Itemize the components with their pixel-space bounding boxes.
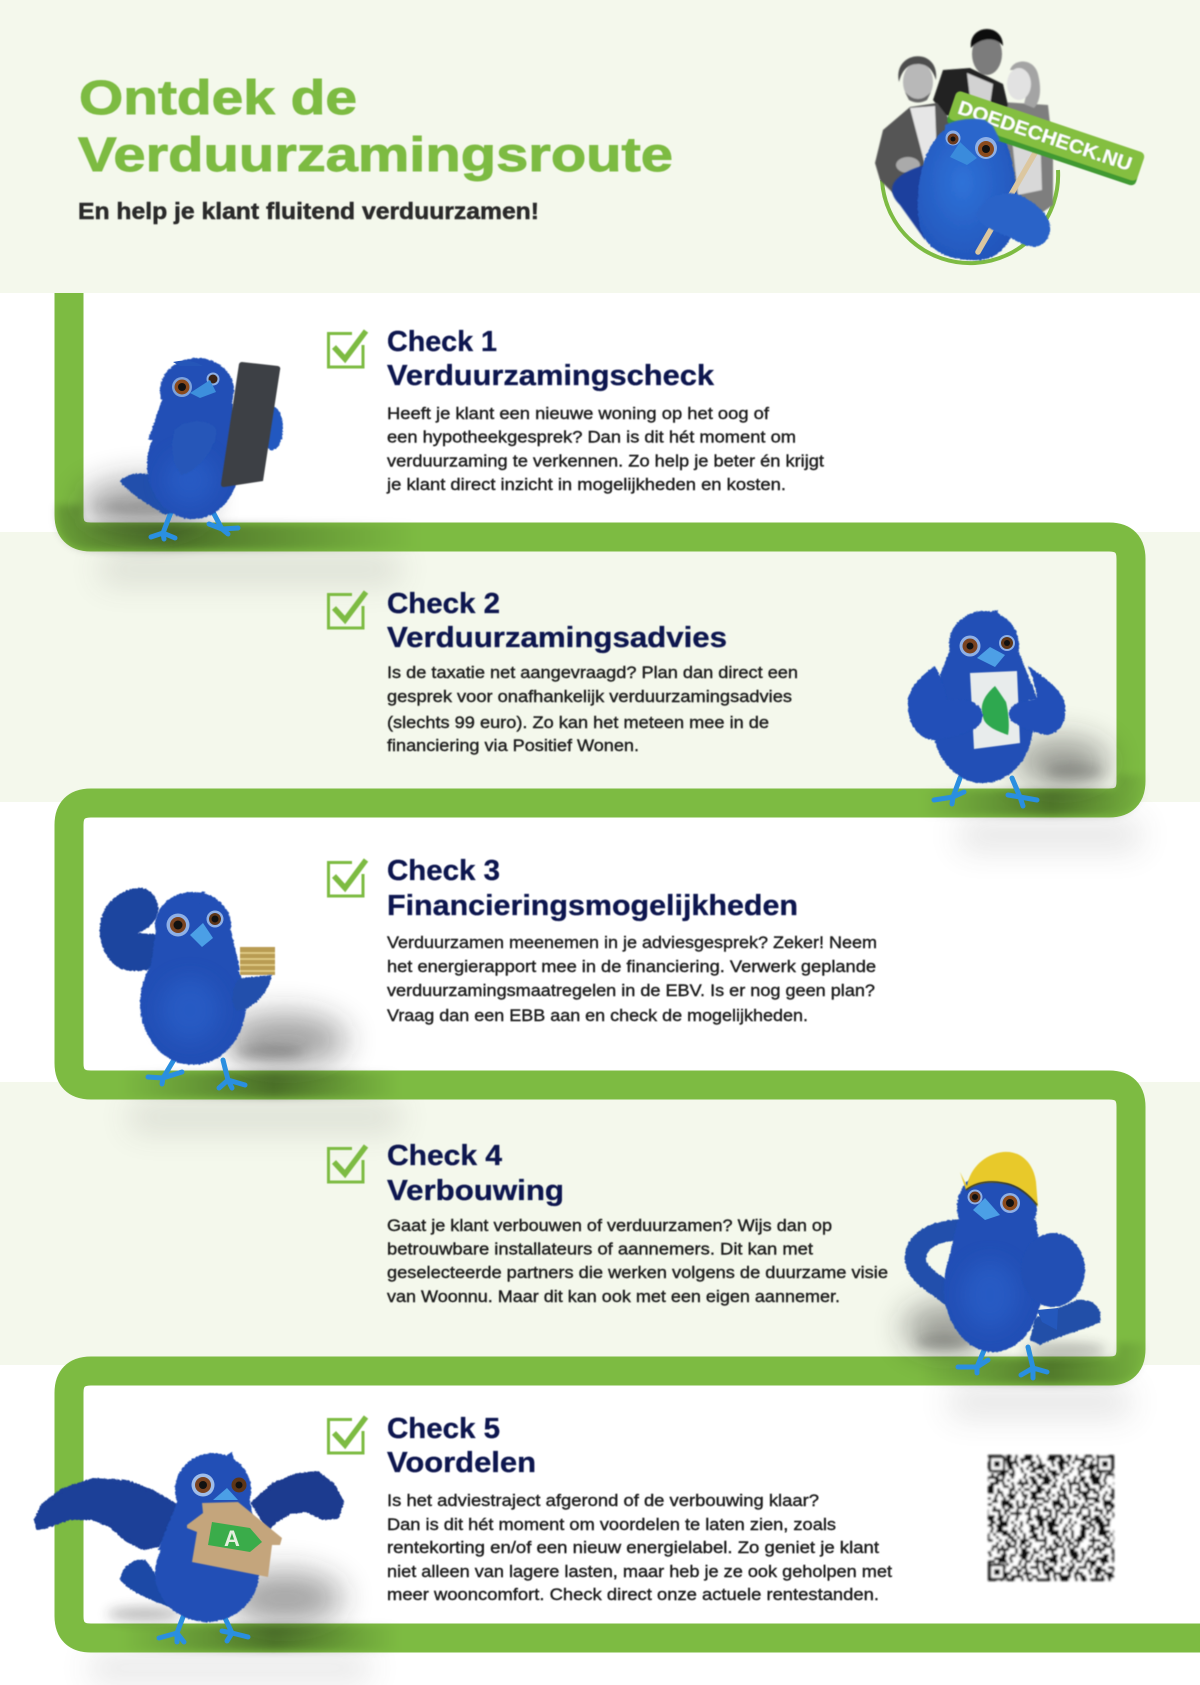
body text: financiering via Positief Wonen. bbox=[387, 736, 639, 755]
body text: (slechts 99 euro). Zo kan het meteen mee in de bbox=[387, 713, 769, 732]
heading bbox=[387, 588, 727, 654]
shadow bbox=[903, 1304, 1107, 1357]
energy label: A bbox=[224, 1526, 240, 1551]
tail bbox=[120, 473, 180, 515]
body text: Dan is dit hét moment om voordelen te laten zien, zoals bbox=[387, 1515, 836, 1534]
bird head front bbox=[945, 119, 1000, 150]
heading bbox=[387, 1413, 536, 1479]
route shadows bbox=[90, 554, 1140, 1681]
house bbox=[187, 1502, 282, 1577]
shadow bbox=[223, 1014, 347, 1066]
sign stick bbox=[978, 153, 1035, 252]
heading bbox=[387, 326, 715, 392]
bird 4 with helmet bbox=[903, 1152, 1107, 1378]
panel: check 4 bbox=[328, 1140, 888, 1306]
heading: Verduurzamingsadvies bbox=[387, 622, 727, 654]
body text: Is de taxatie net aangevraagd? Plan dan direct een bbox=[387, 663, 798, 682]
body text: een hypotheekgesprek? Dan is dit hét moment om bbox=[387, 428, 796, 446]
body volume bbox=[164, 454, 216, 506]
title bbox=[78, 72, 673, 182]
body text: Is het adviestraject afgerond of de verbouwing klaar? bbox=[387, 1491, 819, 1510]
shadow bbox=[1014, 738, 1110, 786]
head details bbox=[968, 1190, 1020, 1220]
icon: checkbox bbox=[328, 592, 366, 628]
energy label bbox=[208, 1522, 262, 1552]
body text: Verduurzamen meenemen in je adviesgesprek? Zeker! Neem bbox=[387, 933, 877, 952]
icon: checkbox bbox=[328, 331, 366, 367]
body text: van Woonnu. Maar dit kan ook met een eigen aannemer. bbox=[387, 1287, 840, 1306]
phone bbox=[221, 362, 280, 487]
body text: verduurzamingsmaatregelen in de EBV. Is er nog geen plan? bbox=[387, 981, 875, 1000]
body text: verduurzaming te verkennen. Zo help je beter én krijgt bbox=[387, 452, 824, 470]
header background bbox=[0, 0, 1200, 293]
feet bbox=[958, 1347, 1047, 1378]
body text: het energierapport mee in de financiering. Verwerk geplande bbox=[387, 957, 876, 976]
bird eyes and beak bbox=[946, 130, 997, 165]
body text: niet alleen van lagere lasten, maar heb je ze ook geholpen met bbox=[387, 1562, 892, 1581]
body text: betrouwbare installateurs of aannemers. Dit kan met bbox=[387, 1240, 813, 1258]
heading: Check 5 bbox=[387, 1413, 500, 1445]
heading: Verduurzamingscheck bbox=[387, 360, 715, 392]
body text: Heeft je klant een nieuwe woning op het oog of bbox=[387, 404, 769, 423]
body bbox=[140, 891, 246, 1065]
title: Ontdek de bbox=[79, 72, 357, 125]
heading bbox=[387, 1140, 564, 1207]
head details bbox=[166, 910, 224, 947]
heading: Check 1 bbox=[387, 326, 497, 358]
sign bbox=[946, 90, 1146, 187]
route line bbox=[69, 293, 1200, 1638]
heading: Check 3 bbox=[387, 855, 500, 887]
hip arm bbox=[915, 1230, 957, 1296]
wing tip bbox=[1037, 1308, 1058, 1330]
body volume bbox=[962, 1261, 1018, 1329]
wing bbox=[172, 421, 216, 475]
subtitle: En help je klant fluitend verduurzamen! bbox=[78, 198, 539, 224]
body text bbox=[387, 1216, 888, 1306]
heading bbox=[387, 855, 798, 922]
leaf bbox=[982, 686, 1009, 735]
body volume bbox=[160, 978, 220, 1042]
feet bbox=[159, 1617, 248, 1642]
body bbox=[930, 610, 1038, 783]
heading: Financieringsmogelijkheden bbox=[387, 890, 798, 922]
body bbox=[944, 1169, 1042, 1352]
wing bbox=[1021, 1233, 1085, 1307]
tail bbox=[120, 1560, 172, 1608]
bird body bbox=[918, 119, 1017, 260]
title block bbox=[78, 72, 673, 224]
bird arm bbox=[976, 193, 1050, 247]
body text bbox=[386, 404, 824, 494]
coins bbox=[240, 947, 275, 975]
heading: Check 2 bbox=[387, 588, 500, 620]
head details bbox=[960, 635, 1015, 667]
feet bbox=[934, 778, 1037, 806]
arms bbox=[908, 666, 983, 740]
panel: check 5 bbox=[328, 1413, 892, 1604]
body text bbox=[387, 1491, 892, 1604]
panel: check 1 bbox=[328, 326, 824, 494]
title: Verduurzamingsroute bbox=[78, 129, 673, 182]
head details bbox=[192, 1474, 246, 1500]
icon: checkbox bbox=[328, 1417, 366, 1453]
circle outline bbox=[882, 170, 1058, 263]
body text: Vraag dan een EBB aan en check de mogelijkheden. bbox=[387, 1006, 808, 1025]
bird 3 with coins bbox=[100, 888, 347, 1088]
panel: check 2 bbox=[328, 588, 798, 755]
bird wing bbox=[892, 165, 945, 240]
head details bbox=[172, 361, 220, 398]
body text bbox=[387, 933, 877, 1025]
body text bbox=[387, 663, 798, 755]
helmet brim bbox=[966, 1182, 1037, 1205]
body text: Gaat je klant verbouwen of verduurzamen? Wijs dan op bbox=[387, 1216, 832, 1235]
bird 1 with phone bbox=[80, 358, 283, 539]
panel: check 3 bbox=[328, 855, 877, 1025]
shadow bbox=[80, 479, 210, 531]
QR code bbox=[988, 1455, 1114, 1581]
heading: Voordelen bbox=[387, 1447, 536, 1479]
feet bbox=[148, 1058, 245, 1088]
heading: Check 4 bbox=[387, 1140, 502, 1172]
illustration: people and bird with sign bbox=[875, 29, 1146, 263]
feet bbox=[151, 512, 238, 539]
pale band check 2 bbox=[0, 532, 1200, 802]
icon: checkbox bbox=[328, 860, 366, 896]
route shading under birds bbox=[69, 505, 1131, 1638]
phone hand bbox=[261, 406, 283, 450]
body bbox=[147, 358, 239, 519]
paper bbox=[970, 671, 1020, 749]
body text: je klant direct inzicht in mogelijkheden en kosten. bbox=[386, 475, 786, 494]
sign: DOEDECHECK.NU bbox=[955, 98, 1134, 176]
helmet bbox=[960, 1152, 1038, 1207]
right wing bbox=[253, 1473, 342, 1528]
body text: geselecteerde partners die werken volgens de duurzame visie bbox=[387, 1263, 888, 1282]
shadow right bbox=[107, 1572, 343, 1624]
pale band check 4 bbox=[0, 1082, 1200, 1365]
raised arm bbox=[100, 888, 165, 971]
bird 2 with leaf paper bbox=[908, 610, 1110, 806]
body text: gesprek voor onafhankelijk verduurzamingsadvies bbox=[387, 687, 792, 706]
left wing bbox=[36, 1480, 180, 1548]
arm bbox=[233, 975, 272, 1010]
body bbox=[155, 1452, 259, 1622]
people bbox=[875, 29, 1053, 214]
icon: checkbox bbox=[328, 1146, 366, 1182]
body text: meer wooncomfort. Check direct onze actuele rentestanden. bbox=[387, 1585, 879, 1604]
heading: Verbouwing bbox=[387, 1175, 564, 1207]
body text: rentekorting en/of een nieuw energielabel. Zo geniet je klant bbox=[387, 1538, 879, 1557]
tail bbox=[1030, 1300, 1101, 1345]
bird 5 with house label bbox=[36, 1452, 343, 1642]
